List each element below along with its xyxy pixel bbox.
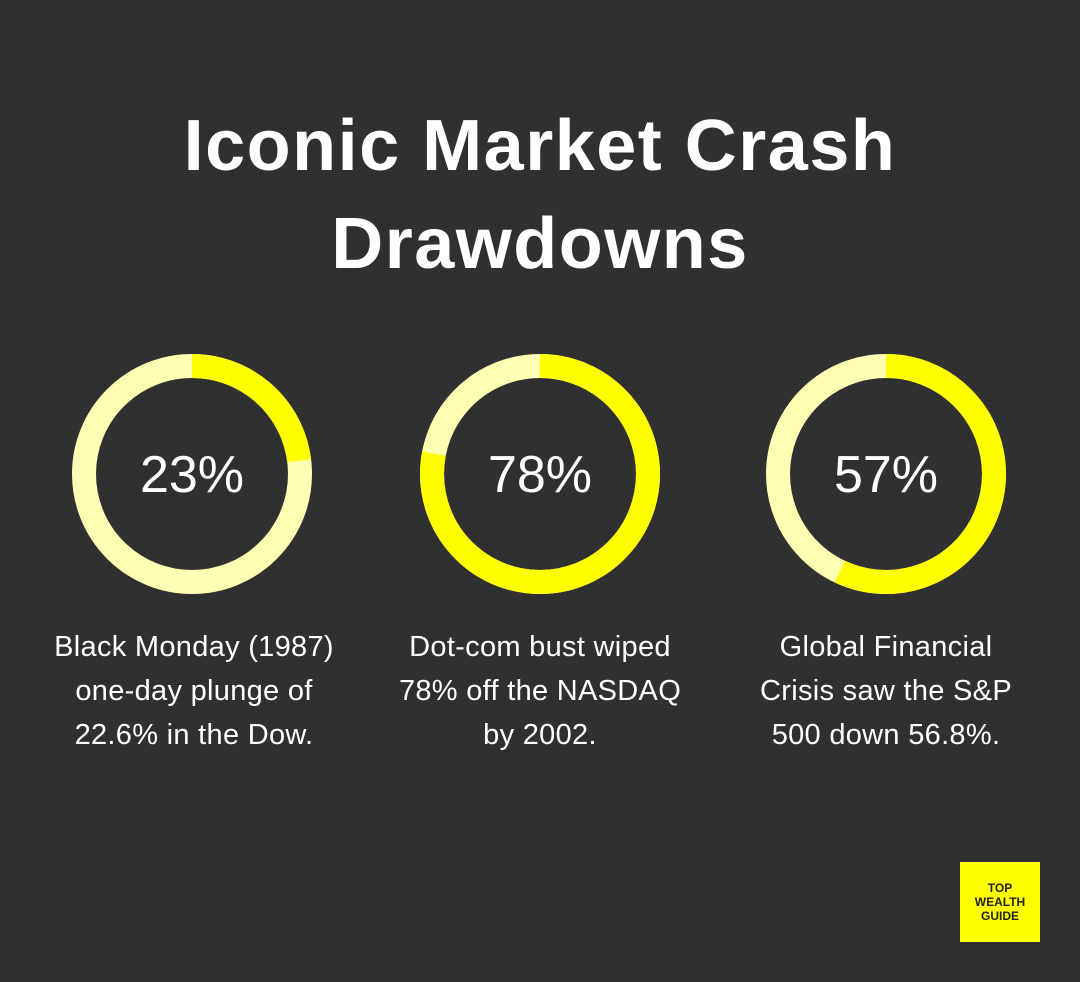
caption: Dot-com: by 2002. [483,719,597,751]
caption: Black Monday: Black Monday (1987) [54,631,334,663]
donut: 57%: 57% [834,446,938,504]
caption: GFC: Global Financial [780,631,992,663]
caption: Black Monday: one-day plunge of [75,675,313,707]
caption: GFC: 500 down 56.8%. [772,719,1000,751]
donut: 78%: 78% [488,446,592,504]
title: Drawdowns [331,204,749,284]
logo: WEALTH [975,895,1025,909]
caption: GFC: Crisis saw the S&P [760,675,1012,707]
logo: TOP [988,881,1012,895]
title: Iconic Market Crash [184,106,896,186]
caption: Black Monday: 22.6% in the Dow. [75,719,313,751]
caption: Dot-com: 78% off the NASDAQ [399,675,681,707]
donut: 78% [432,366,648,582]
caption: Black Monday [54,631,334,751]
donut: 57% [778,366,994,582]
donut: 23% [84,366,300,582]
title [184,106,896,284]
caption: Dot-com [399,631,681,751]
caption: Dot-com: Dot-com bust wiped [409,631,671,663]
caption: GFC [760,631,1012,751]
logo [960,862,1040,942]
donut: 23%: 23% [140,446,244,504]
logo: GUIDE [981,909,1019,923]
